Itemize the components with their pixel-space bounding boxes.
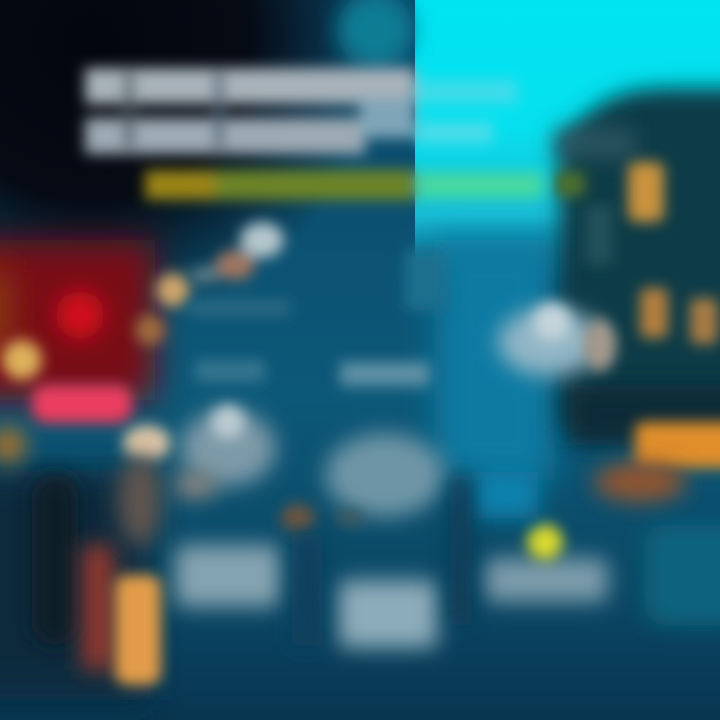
panel: left red storefront (0, 240, 190, 463)
panel: lower blue accents (292, 472, 720, 645)
card: top icon (189, 222, 290, 316)
title (85, 68, 518, 154)
icon: yellow dot (527, 524, 563, 560)
subtitle (145, 170, 585, 200)
card: white cloud right (498, 303, 616, 376)
card: grey icon left (173, 405, 276, 499)
figure: dark silhouette with orange light (32, 454, 162, 685)
building: right side (555, 88, 720, 502)
card: middle labels (195, 250, 445, 386)
card: grey icon centre (281, 433, 445, 532)
card: lower grey blocks (175, 545, 608, 648)
